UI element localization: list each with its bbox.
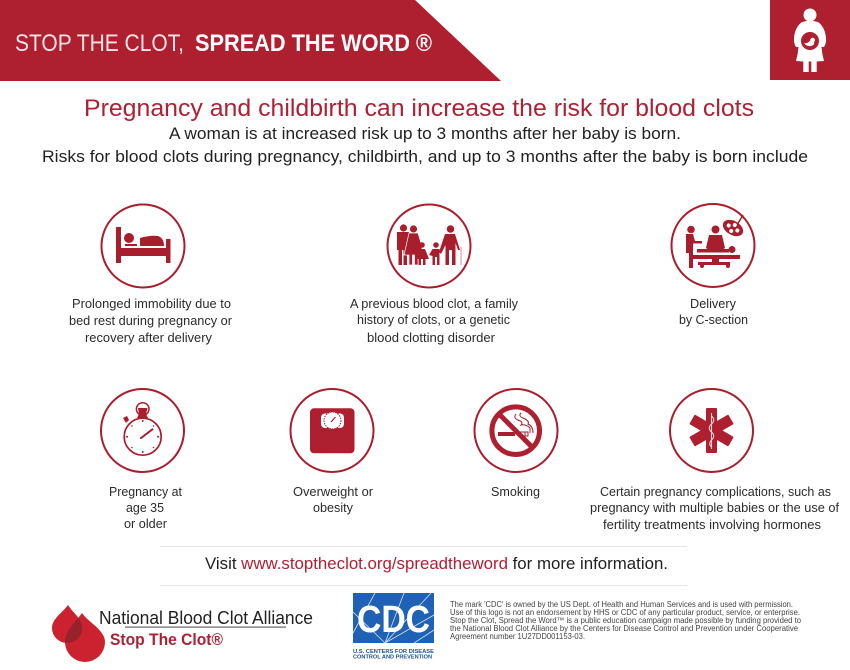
icon: blood drops: [52, 605, 105, 662]
label: immobility: recovery after delivery: [85, 330, 212, 345]
label: family history: blood clotting disorder: [367, 330, 496, 345]
label: weight: obesity: [313, 500, 353, 515]
label: family history: A previous blood clot, a family: [350, 296, 518, 311]
panel: c-section: [672, 204, 754, 327]
panel: smoking: [474, 389, 558, 499]
panel: family history: [350, 204, 518, 345]
logo: CDC: CDC: [357, 599, 430, 641]
main heading: Pregnancy and childbirth can increase the risk for blood clots: [84, 95, 754, 122]
label: age: [109, 484, 182, 531]
banner title: SPREAD THE WORD ®: [195, 30, 432, 57]
disclaimer text: the National Blood Clot Alliance by the Centers for Disease Control and Prevention under Cooperative: [450, 624, 799, 633]
logo: CDC: U.S. CENTERS FOR DISEASE: [353, 649, 434, 655]
logo: CDC: [353, 593, 434, 660]
panel: complications: [590, 389, 839, 532]
disclaimer text: Agreement number 1U27DD001153-03.: [450, 632, 585, 641]
label: c-section: by C-section: [679, 312, 748, 327]
disclaimer text: Stop the Clot, Spread the Word™ is a public education campaign made possible by funding provided to: [450, 616, 802, 625]
icon: stopwatch: [101, 389, 184, 472]
icon: no smoking: [474, 389, 558, 472]
panel: immobility: [69, 204, 233, 345]
panel: weight: [290, 389, 374, 515]
subheading line 1: A woman is at increased risk up to 3 months after her baby is born.: [169, 124, 681, 143]
icon: family: [388, 204, 470, 288]
organization name: National Blood Clot Alliance: [99, 607, 313, 628]
label: immobility: bed rest during pregnancy or: [69, 313, 233, 328]
icon: pregnant woman badge: [770, 0, 850, 80]
label: age: or older: [124, 516, 168, 531]
banner: [0, 0, 501, 81]
icon: person in bed: [102, 204, 184, 288]
label: age: Pregnancy at: [109, 484, 182, 499]
label: complications: [590, 484, 839, 532]
call to action: Visit www.stoptheclot.org/spreadtheword for more information.: [205, 555, 668, 573]
label: immobility: Prolonged immobility due to: [72, 296, 231, 311]
label: weight: Overweight or: [293, 484, 374, 499]
disclaimer text: [450, 600, 802, 641]
label: complications: Certain pregnancy complications, such as: [600, 484, 831, 499]
disclaimer text: Use of this logo is not an endorsement by HHS or CDC of any particular product, service, or enterprise.: [450, 608, 800, 617]
label: age: age 35: [126, 500, 164, 515]
label: weight: [293, 484, 374, 515]
label: family history: history of clots, or a genetic: [357, 312, 510, 327]
subheading line 2: Risks for blood clots during pregnancy, childbirth, and up to 3 months after the baby is born include: [42, 147, 808, 166]
banner title: [15, 30, 432, 57]
label: immobility: [69, 296, 233, 345]
label: c-section: Delivery: [690, 296, 736, 311]
panel: age: [101, 389, 184, 531]
label: complications: pregnancy with multiple babies or the use of: [590, 500, 839, 515]
disclaimer text: The mark 'CDC' is owned by the US Dept. of Health and Human Services and is used with permission.: [450, 600, 793, 609]
tagline: Stop The Clot®: [110, 631, 223, 649]
icon: scale: [290, 389, 374, 472]
icon: star of life: [670, 389, 753, 472]
label: c-section: [679, 296, 748, 327]
icon: surgery team: [672, 204, 754, 287]
label: smoking: Smoking: [491, 484, 540, 499]
logo: CDC: CONTROL AND PREVENTION: [353, 654, 432, 660]
banner title: STOP THE CLOT,: [15, 30, 184, 57]
logo: National Blood Clot Alliance: [52, 605, 313, 662]
label: family history: [350, 296, 518, 345]
label: complications: fertility treatments involving hormones: [603, 517, 821, 532]
